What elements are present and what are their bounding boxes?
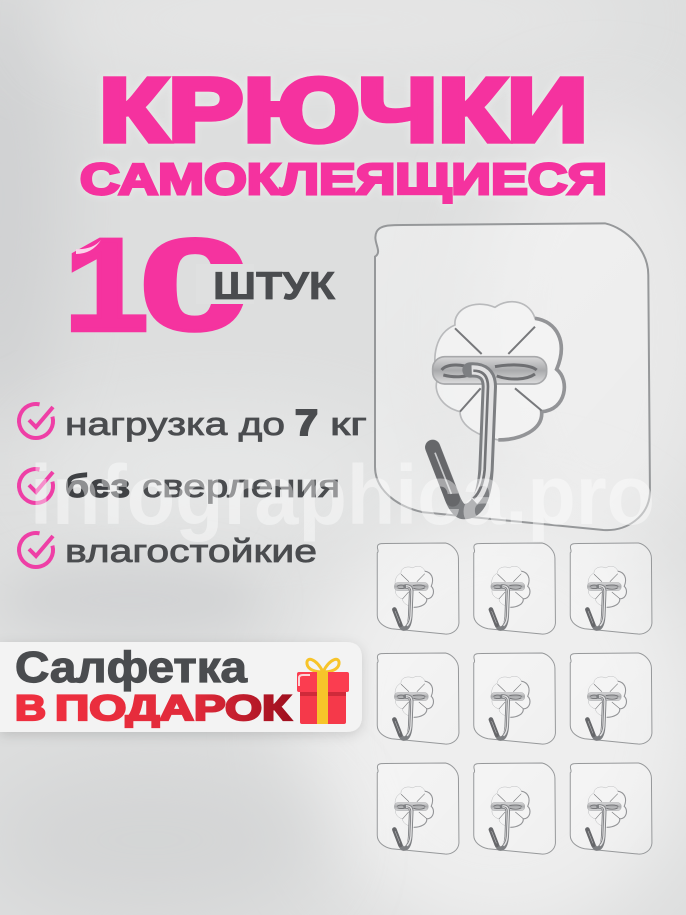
quantity: 10 штук: 0 <box>138 211 252 358</box>
small hook 2 <box>474 543 555 634</box>
banner text: Салфетка: Салфетка <box>15 643 248 692</box>
small hooks grid <box>377 543 652 854</box>
icon: gift box <box>297 659 349 724</box>
feature: load up to 7 kg: 7 <box>295 402 318 443</box>
feature: load up to 7 kg: нагрузка до <box>65 406 285 442</box>
small hook 5 <box>474 653 555 744</box>
small hook 1 <box>377 543 459 634</box>
small hook 9 <box>570 763 652 854</box>
banner text: в подарок: В <box>15 689 46 728</box>
banner text: в подарок: ПОДАРОК <box>55 689 292 728</box>
feature: waterproof <box>15 529 317 571</box>
subtitle: САМОКЛЕЯЩИЕСЯ: САМОКЛЕЯЩИЕСЯ <box>80 155 607 204</box>
large hook product <box>375 223 650 530</box>
feature: waterproof: влагостойкие <box>65 533 317 569</box>
quantity: 10 штук: 1 <box>64 211 148 358</box>
feature: load up to 7 kg: кг <box>330 406 367 442</box>
feature: load up to 7 kg <box>15 400 367 443</box>
small hook 8 <box>474 763 555 854</box>
watermark: infographica.pro <box>30 448 655 542</box>
feature list <box>15 400 367 571</box>
banner text: в подарок <box>15 689 292 728</box>
feature: no drilling: сверления <box>142 468 340 504</box>
quantity: 10 штук: ШТУК <box>213 265 335 308</box>
gift banner <box>0 642 362 732</box>
small hook 7 <box>377 763 459 854</box>
title: КРЮЧКИ: КРЮЧКИ <box>99 61 588 161</box>
small hook 3 <box>570 543 652 634</box>
quantity: 10 штук <box>64 211 335 358</box>
feature: no drilling: без <box>65 468 130 504</box>
small hook 4 <box>377 653 459 744</box>
feature: no drilling <box>15 465 340 507</box>
small hook 6 <box>570 653 652 744</box>
